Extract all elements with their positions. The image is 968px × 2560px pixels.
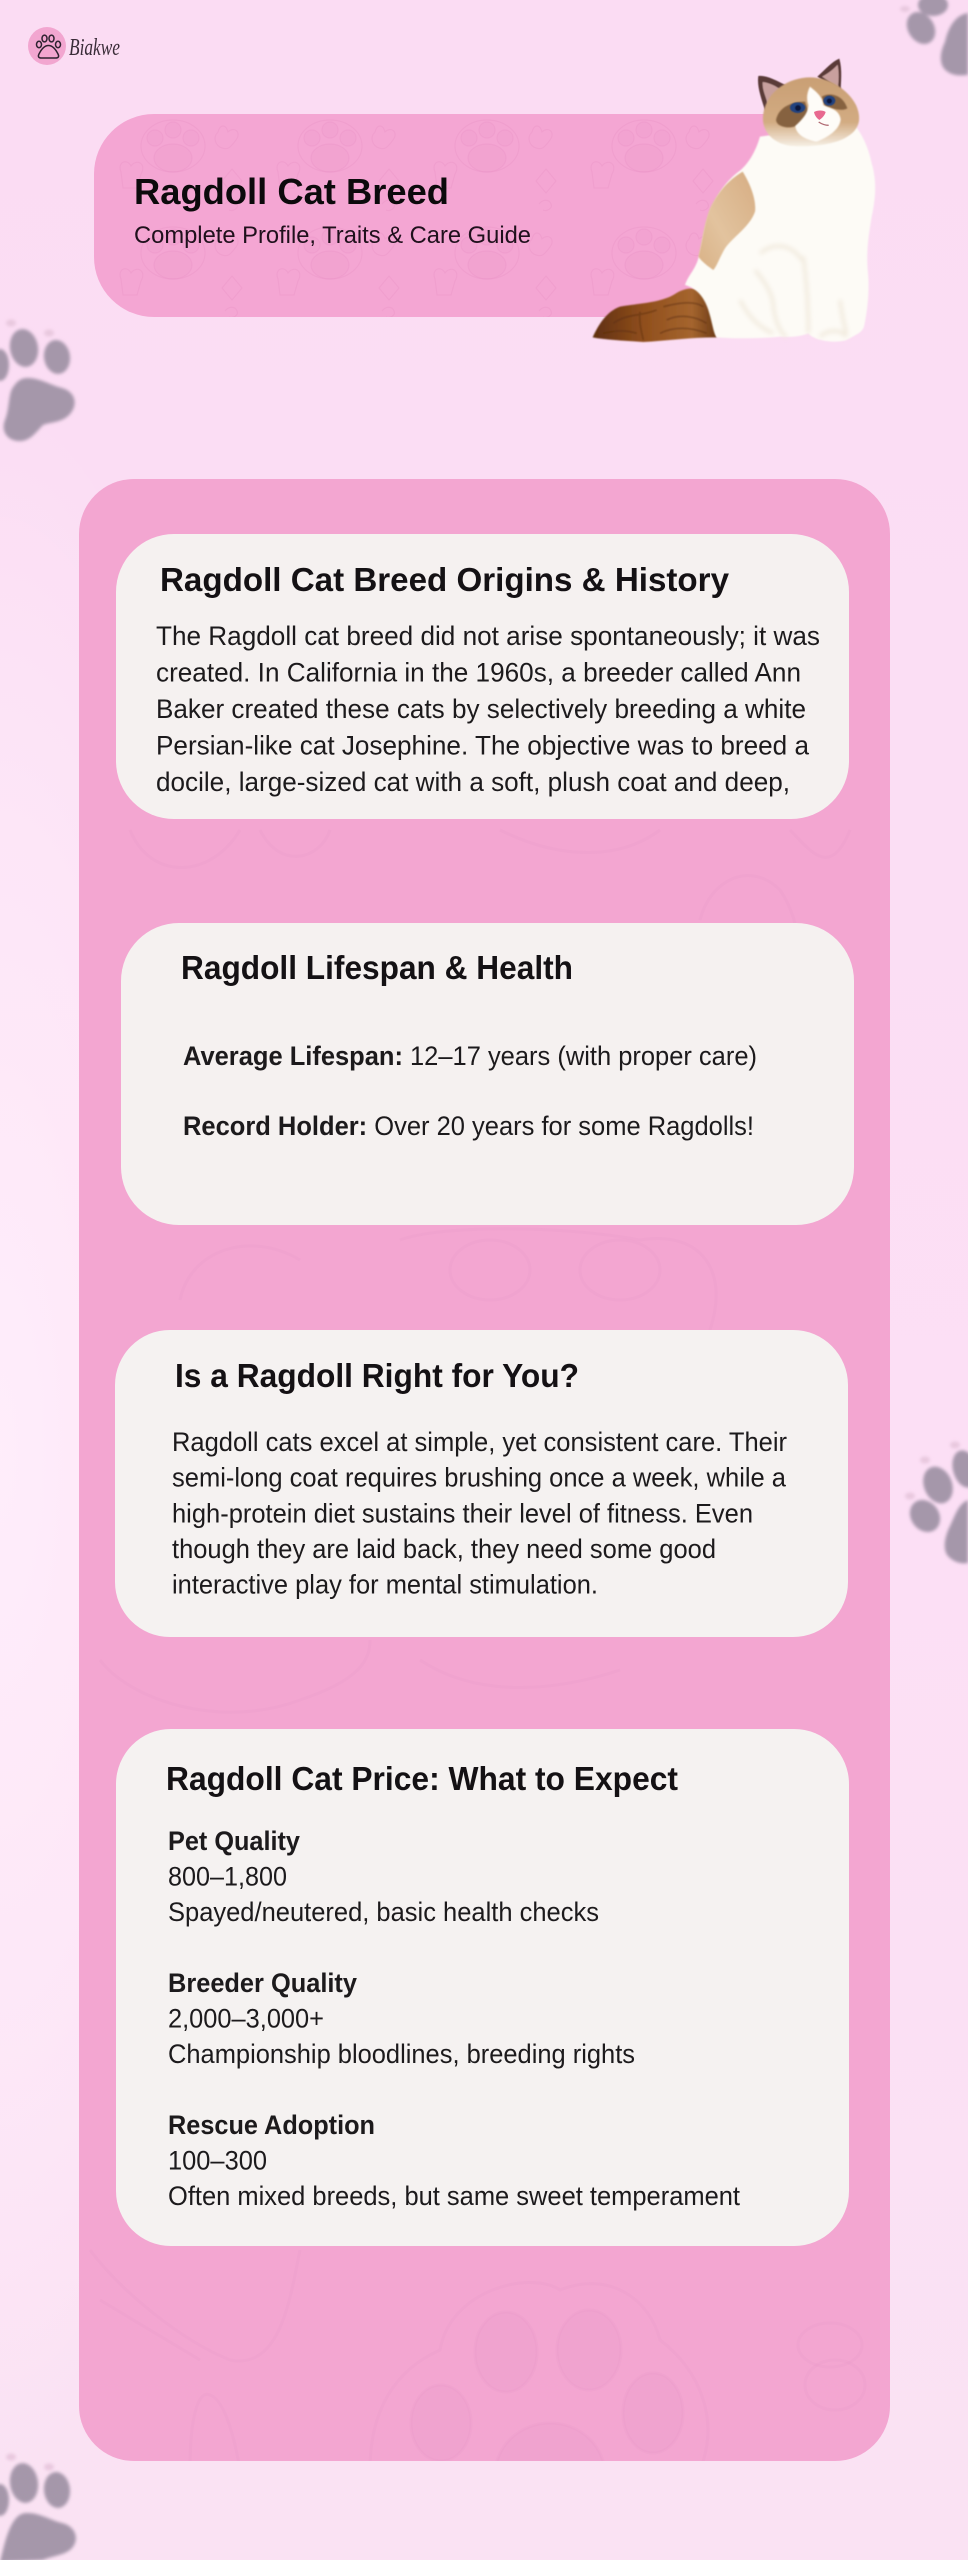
panel: header banner — [94, 114, 830, 317]
body text: though they are laid back, they need some good — [172, 1534, 716, 1564]
panel: is a ragdoll right for you — [115, 1330, 848, 1637]
breeder quality — [168, 1968, 635, 2069]
body text: The Ragdoll cat breed did not arise spontaneously; it was — [156, 621, 820, 651]
heading: Is a Ragdoll Right for You? — [175, 1357, 579, 1394]
cat head — [758, 59, 859, 146]
heading: Ragdoll Cat Price: What to Expect — [166, 1760, 678, 1797]
average lifespan: Average Lifespan: 12–17 years (with proper care) — [183, 1041, 757, 1071]
panel: origins and history — [116, 534, 849, 819]
pet quality: 800–1,800 — [168, 1862, 287, 1892]
rescue adoption: 100–300 — [168, 2146, 267, 2176]
body text: Baker created these cats by selectively breeding a white — [156, 694, 806, 724]
icon: paw print right middle — [904, 1442, 968, 1563]
subtitle: Complete Profile, Traits & Care Guide — [134, 222, 531, 249]
record holder: Record Holder: Over 20 years for some Ragdolls! — [183, 1111, 754, 1141]
icon: paw print bottom left — [0, 2454, 76, 2560]
nose and mouth — [814, 110, 826, 120]
body text: Persian-like cat Josephine. The objective was to breed a — [156, 730, 810, 760]
face fur — [763, 77, 859, 146]
pet quality — [168, 1826, 599, 1927]
breeder quality: 2,000–3,000+ — [168, 2004, 324, 2034]
pet quality: Pet Quality — [168, 1826, 300, 1856]
icon: paw print left — [0, 320, 75, 441]
cat tan flank patch — [698, 172, 755, 270]
rescue adoption: Often mixed breeds, but same sweet temperament — [168, 2181, 741, 2211]
body text: interactive play for mental stimulation. — [172, 1570, 598, 1600]
rescue adoption: Rescue Adoption — [168, 2110, 375, 2140]
pet quality: Spayed/neutered, basic health checks — [168, 1897, 599, 1927]
illustration: ragdoll cat — [593, 59, 875, 342]
cat leg shading — [740, 246, 847, 337]
panel: lifespan and health — [121, 923, 854, 1225]
breeder quality: Championship bloodlines, breeding rights — [168, 2039, 635, 2069]
rescue adoption — [168, 2110, 741, 2211]
heading: Ragdoll Lifespan & Health — [181, 949, 573, 986]
panel: price — [116, 1729, 849, 2246]
decorative paw shapes — [90, 554, 865, 2527]
ears — [758, 59, 841, 115]
body text: Ragdoll cats excel at simple, yet consistent care. Their — [172, 1427, 787, 1457]
dark mask — [776, 102, 808, 127]
breeder quality: Breeder Quality — [168, 1968, 357, 1998]
icon: logo paw badge — [28, 27, 66, 65]
panel: main content — [79, 479, 890, 2527]
logo — [28, 27, 120, 65]
logo wordmark: Biakwe — [69, 35, 120, 61]
white blaze and muzzle — [795, 87, 841, 142]
cat body — [685, 123, 875, 342]
title: Ragdoll Cat Breed — [134, 171, 449, 212]
body text: created. In California in the 1960s, a breeder called Ann — [156, 658, 801, 688]
body text: docile, large-sized cat with a soft, plush coat and deep, — [156, 767, 790, 797]
eyes — [790, 96, 835, 113]
icon: paw print top right — [900, 0, 968, 75]
cat tail — [593, 288, 717, 342]
body text — [172, 1427, 787, 1600]
body text: semi-long coat requires brushing once a week, while a — [172, 1462, 786, 1492]
body text — [156, 621, 820, 797]
body text: high-protein diet sustains their level of fitness. Even — [172, 1498, 753, 1528]
heading: Ragdoll Cat Breed Origins & History — [160, 561, 730, 598]
